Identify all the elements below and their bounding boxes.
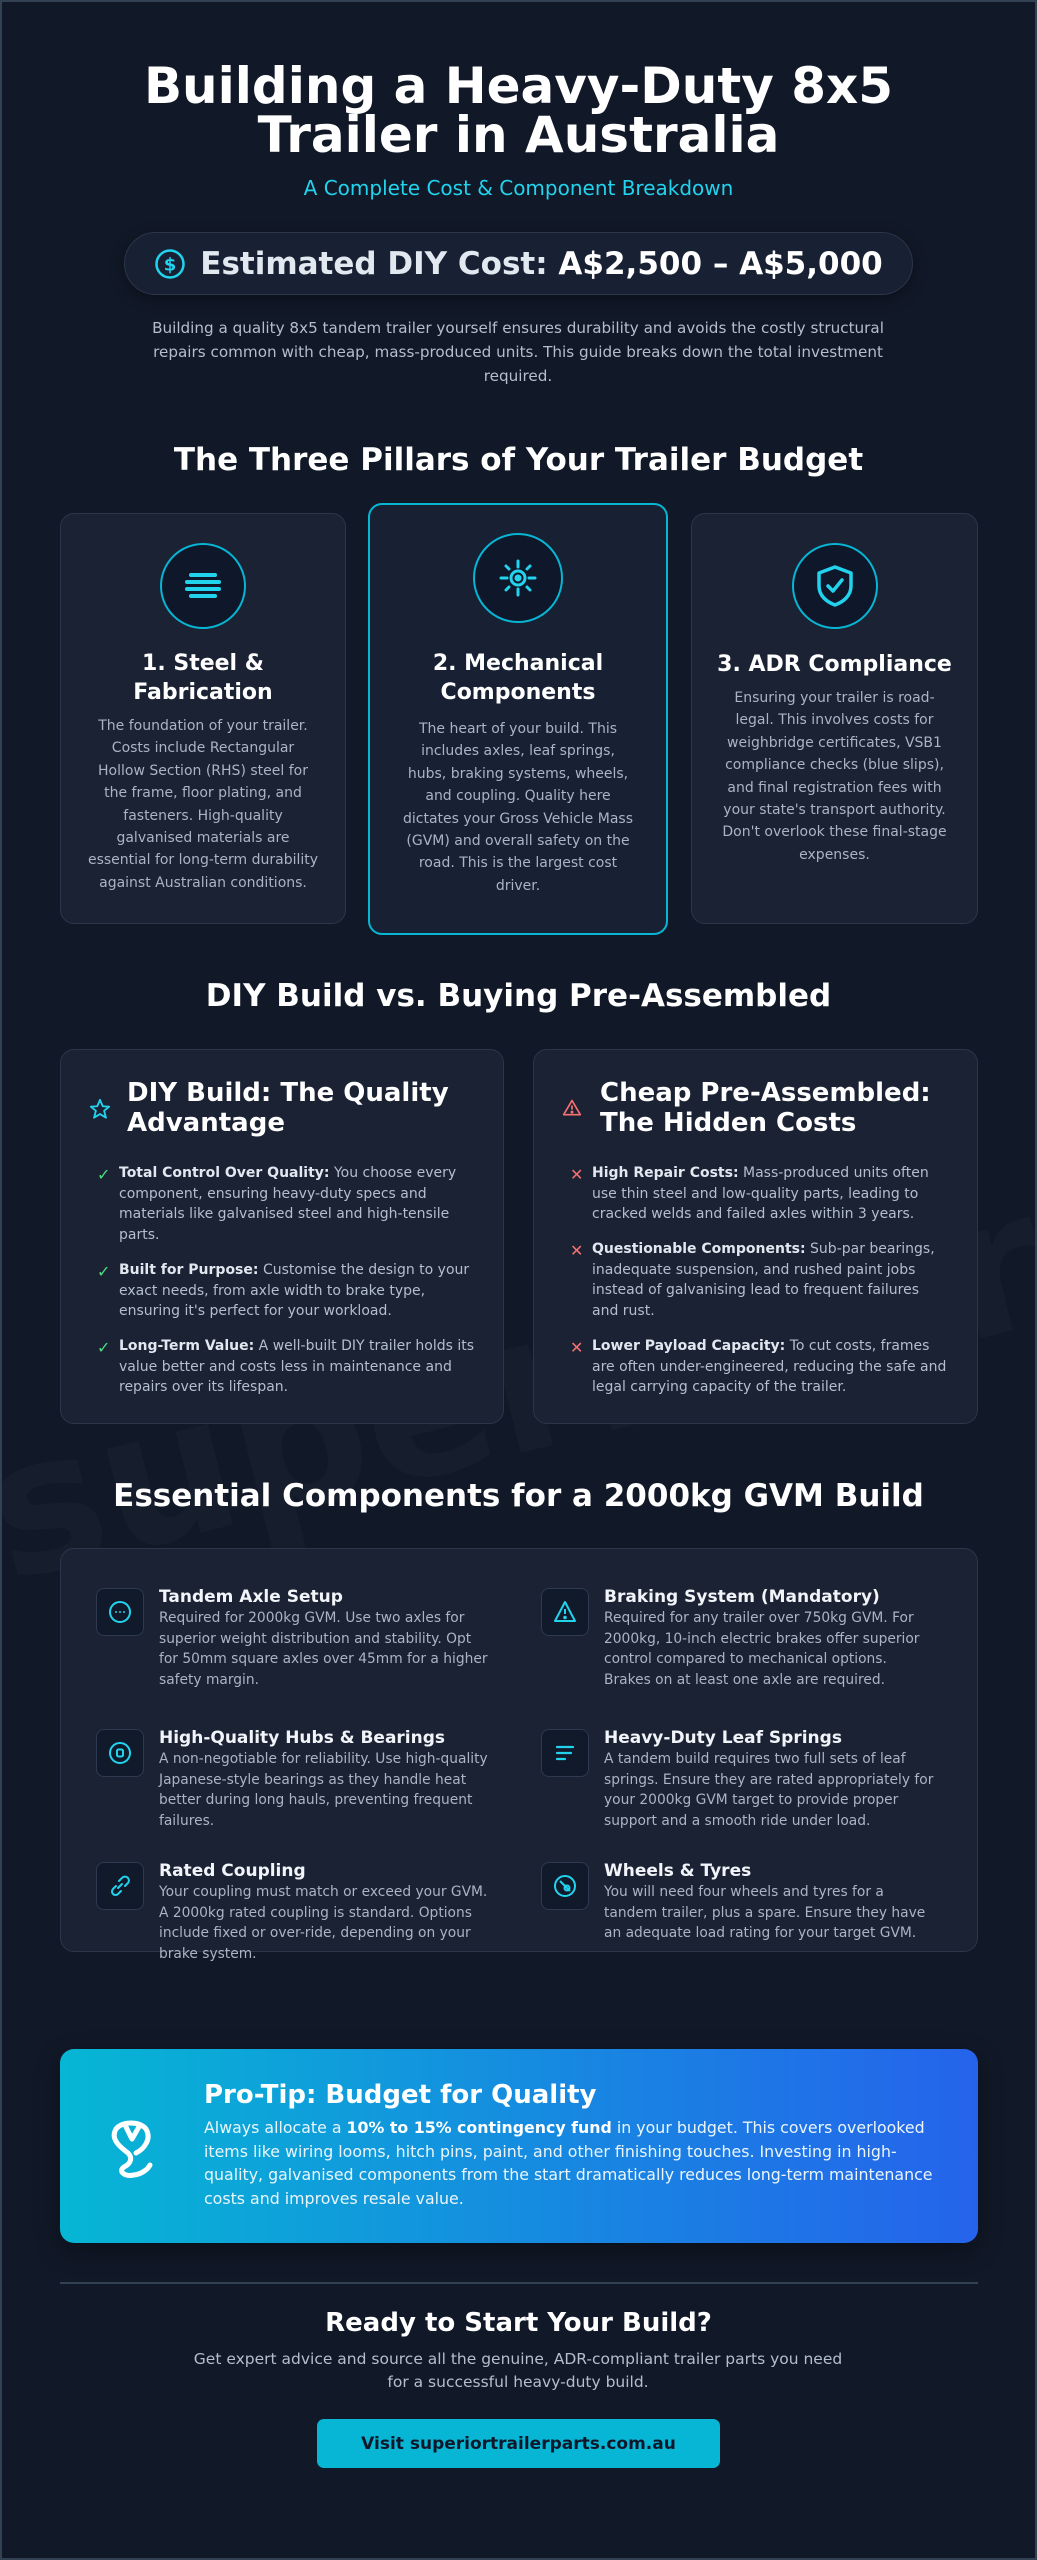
icon: steel beam — [160, 543, 246, 629]
heading: DIY vs pre-assembled: DIY Build vs. Buying Pre-Assembled — [206, 978, 831, 1014]
panel: components: Braking System (Mandatory) — [604, 1587, 880, 1607]
component: wheels — [541, 1861, 925, 1941]
icon: shield — [792, 543, 878, 629]
panel: steel & fabrication: The foundation of your trailer. Costs include Rectangular Hollow Section (RHS) steel for the frame, floor plating, and fasteners. High-quality galvanised materials are essential for long-term durability against Australian conditions. — [88, 718, 318, 891]
callout: pro-tip — [60, 2049, 978, 2243]
icon: dollar: $ — [164, 254, 177, 275]
panel: cheap pre-assembled: ✕ — [570, 1165, 583, 1184]
panel: components: Required for any trailer over 750kg GVM. For 2000kg, 10-inch electric brakes offer superior control compared to mechanical options. Brakes on at least one axle are required. — [604, 1610, 919, 1688]
panel: ADR compliance: Ensuring your trailer is road-legal. This involves costs for weighbridge certificates, VSB1 compliance checks (blue slips), and final registration fees with your state's transport authority. Don't overlook these final-stage expenses. — [722, 690, 947, 863]
button: Visit superiortrailerparts.com.au — [361, 2434, 676, 2454]
panel: cheap pre-assembled: Lower Payload Capacity: To cut costs, frames are often under-engineered, reducing the safe and legal carrying capacity of the trailer. — [592, 1338, 946, 1395]
panel: components: A tandem build requires two full sets of leaf springs. Ensure they are rated appropriately for your 2000kg GVM target to provide proper support and a smooth ride under load. — [604, 1751, 933, 1828]
panel: DIY build: Advantage — [127, 1108, 285, 1138]
panel: steel & fabrication: Fabrication — [133, 680, 273, 705]
heading: three pillars: The Three Pillars of Your Trailer Budget — [174, 442, 863, 478]
icon: star — [90, 1098, 110, 1119]
panel: components: Wheels & Tyres — [604, 1861, 751, 1881]
title: Trailer in Australia — [258, 106, 779, 164]
panel: components: Heavy-Duty Leaf Springs — [604, 1728, 842, 1748]
panel: components: High-Quality Hubs & Bearings — [159, 1728, 445, 1748]
panel: components — [60, 1548, 978, 1952]
component: tandem axle — [96, 1587, 488, 1688]
intro paragraph: Building a quality 8x5 tandem trailer yourself ensures durability and avoids the costly structural repairs common with cheap, mass-produced units. This guide breaks down the total investment required. — [152, 319, 884, 385]
panel: ADR compliance — [691, 513, 978, 924]
panel: ADR compliance: 3. ADR Compliance — [717, 652, 952, 677]
panel: mechanical components: Components — [441, 680, 595, 705]
CTA paragraph: Get expert advice and source all the genuine, ADR-compliant trailer parts you need for a successful heavy-duty build. — [194, 2350, 842, 2391]
panel: cheap pre-assembled: ✕ — [570, 1241, 583, 1260]
panel: components: A non-negotiable for reliability. Use high-quality Japanese-style bearings as they handle heat better during long hauls, preventing frequent failures. — [159, 1751, 488, 1828]
panel: DIY build: ✓ — [97, 1338, 110, 1357]
panel: components: Rated Coupling — [159, 1861, 306, 1881]
panel: cheap pre-assembled: Cheap Pre-Assembled: — [600, 1078, 931, 1108]
panel: DIY build: Long-Term Value: A well-built DIY trailer holds its value better and costs less in maintenance and repairs over its lifespan. — [119, 1338, 474, 1395]
panel: mechanical components: 2. Mechanical — [433, 651, 603, 676]
panel: mechanical components: The heart of your build. This includes axles, leaf springs, hubs, braking systems, wheels, and coupling. Quality here dictates your Gross Vehicle Mass (GVM) and overall safety on the road. This is the largest cost driver. — [403, 721, 633, 894]
icon: gear — [473, 533, 563, 623]
heading: ready to start: Ready to Start Your Build? — [325, 2308, 712, 2338]
panel: DIY build: ✓ — [97, 1165, 110, 1184]
panel: DIY build — [60, 1049, 504, 1424]
panel: cheap pre-assembled — [533, 1049, 978, 1424]
icon: warning — [562, 1100, 582, 1116]
icon: pro-tip — [112, 2120, 152, 2178]
component: braking — [541, 1587, 920, 1688]
panel: cheap pre-assembled: The Hidden Costs — [600, 1108, 856, 1138]
panel: DIY build: Built for Purpose: Customise the design to your exact needs, from axle width to brake type, ensuring it's perfect for your workload. — [119, 1262, 469, 1319]
panel: cheap pre-assembled: High Repair Costs: Mass-produced units often use thin steel and low-quality parts, leading to cracked welds and failed axles within 3 years. — [592, 1165, 929, 1222]
heading: essential components: Essential Components for a 2000kg GVM Build — [113, 1478, 924, 1514]
title — [144, 57, 893, 164]
component: hubs — [96, 1728, 488, 1828]
panel: components: You will need four wheels and tyres for a tandem trailer, plus a spare. Ensure they have an adequate load rating for your target GVM. — [604, 1884, 925, 1941]
panel: steel & fabrication: 1. Steel & — [142, 651, 264, 676]
panel: cheap pre-assembled: ✕ — [570, 1338, 583, 1357]
component: coupling — [96, 1861, 487, 1962]
panel: components: Required for 2000kg GVM. Use two axles for superior weight distribution and stability. Opt for 50mm square axles over 45mm for a higher safety margin. — [159, 1610, 488, 1688]
panel: steel & fabrication — [60, 513, 346, 924]
panel: cheap pre-assembled: Questionable Components: Sub-par bearings, inadequate suspension, and rushed paint jobs instead of galvanising lead to frequent failures and rust. — [592, 1241, 935, 1319]
button — [317, 2419, 720, 2468]
panel: DIY build: DIY Build: The Quality — [127, 1078, 449, 1108]
component: leaf springs — [541, 1728, 934, 1828]
callout: pro-tip: Always allocate a 10% to 15% contingency fund in your budget. This covers overlooked items like wiring looms, hitch pins, paint, and other finishing touches. Investing in high-quality, galvanised components from the start dramatically reduces long-term maintenance costs and improves resale value. — [204, 2118, 933, 2208]
panel: DIY build: ✓ — [97, 1262, 110, 1281]
panel: components: Tandem Axle Setup — [159, 1587, 343, 1607]
subtitle: A Complete Cost & Component Breakdown — [304, 176, 733, 200]
callout: pro-tip: Pro-Tip: Budget for Quality — [204, 2080, 596, 2110]
cost pill: Estimated DIY Cost: A$2,500 – A$5,000 — [200, 246, 883, 282]
panel: components: Your coupling must match or exceed your GVM. A 2000kg rated coupling is standard. Options include fixed or over-ride, depending on your brake system. — [159, 1884, 487, 1962]
panel: DIY build: Total Control Over Quality: You choose every component, ensuring heavy-duty specs and materials like galvanised steel and high-tensile parts. — [119, 1165, 456, 1243]
panel: mechanical components — [368, 503, 668, 935]
title: Building a Heavy-Duty 8x5 — [144, 57, 893, 115]
icon: dollar — [155, 249, 185, 279]
cost pill — [124, 232, 913, 295]
